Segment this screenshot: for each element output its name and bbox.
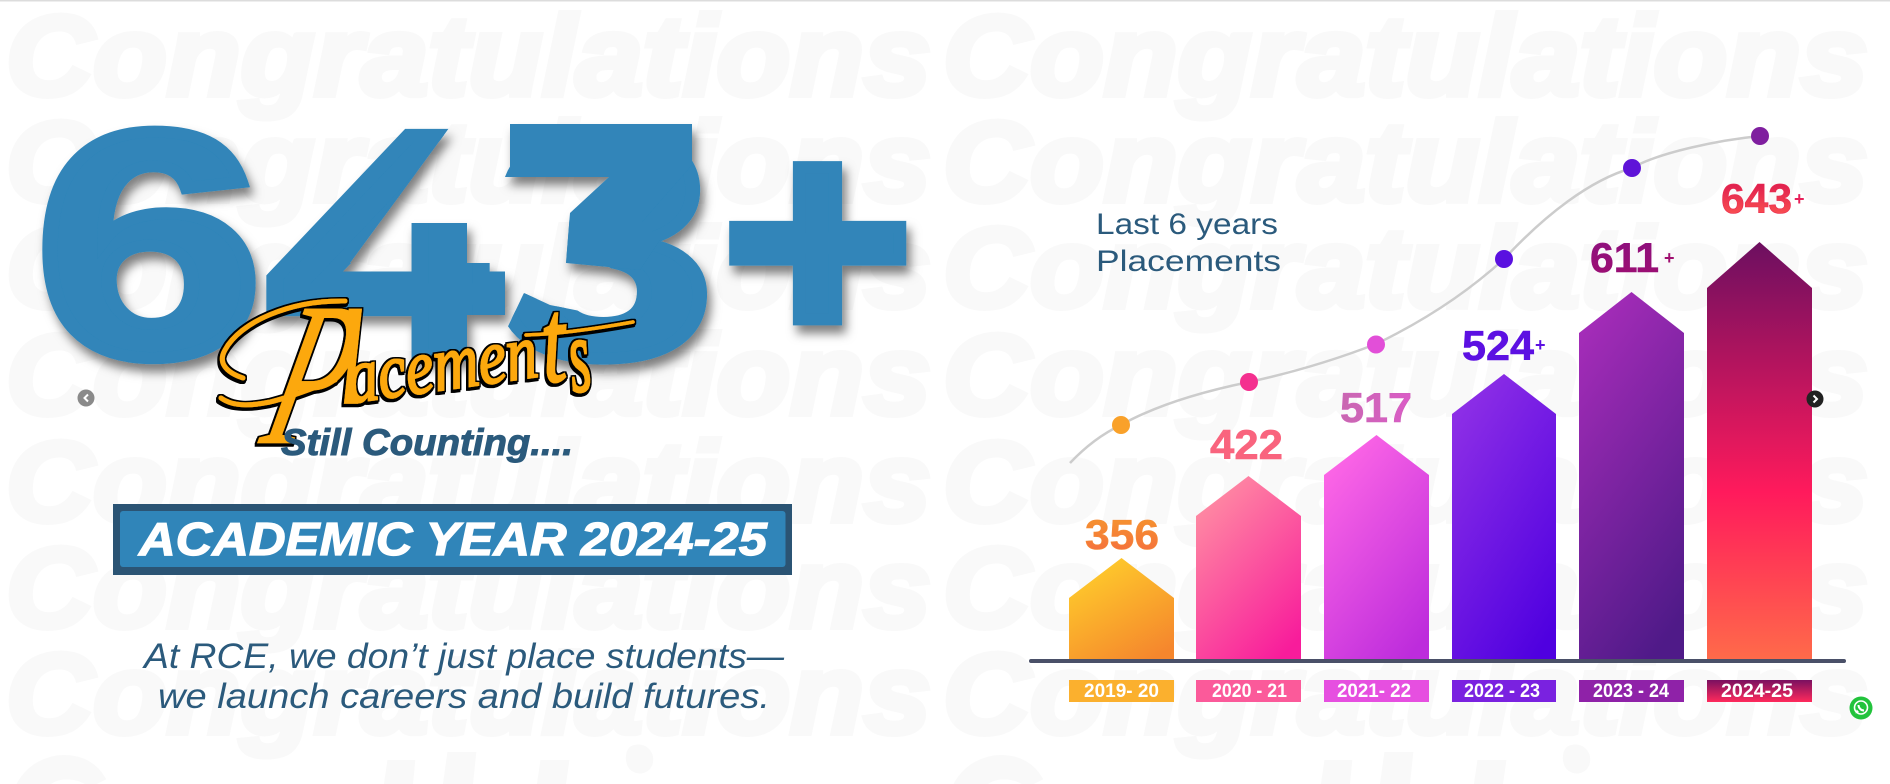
description text: we launch careers and build futures. [158, 677, 770, 716]
background pattern: Congratulations watermark: Congratulations [943, 205, 1868, 331]
bar 2023-24 [1579, 292, 1684, 659]
banner: Academic Year [113, 504, 792, 575]
tagline: Still Counting....: Still Counting.... [281, 422, 573, 463]
bar chart: placements by year [1029, 242, 1846, 663]
script word: Placements: s [560, 298, 597, 416]
chart title [1096, 208, 1281, 278]
headline number 643+: 3 [495, 66, 714, 424]
background pattern: Congratulations watermark: Congratulations [943, 312, 1868, 438]
value labels: + [1664, 248, 1675, 268]
headline number 643+: 4 [268, 66, 529, 423]
value labels: 422 [1210, 421, 1283, 468]
value labels: 524 [1462, 322, 1535, 369]
script word: Placements: l [340, 284, 363, 433]
bar 2020-21 [1196, 476, 1301, 659]
background pattern: Congratulations watermark: Congratulations [6, 525, 931, 651]
chart title: Last 6 years [1096, 208, 1278, 241]
value labels: 611 [1590, 234, 1659, 281]
year labels: 2024-25 [1721, 681, 1793, 702]
script word: Placements [221, 261, 633, 488]
year labels: 2023 - 24 [1593, 681, 1669, 702]
banner: Academic Year: ACADEMIC YEAR 2024-25 [138, 513, 769, 565]
value labels [1085, 175, 1805, 558]
script word: Placements: P [246, 261, 381, 488]
value labels: + [1794, 189, 1805, 209]
background pattern: Congratulations watermark: Congratulations [6, 205, 931, 331]
description text [142, 637, 785, 716]
background pattern: Congratulations watermark: Congratulations [943, 631, 1868, 757]
bar 2022-23 [1452, 374, 1556, 659]
background pattern: Congratulations watermark: Congratulations [943, 525, 1868, 651]
year labels: 2021- 22 [1337, 681, 1411, 702]
headline number 643+: + [722, 72, 913, 407]
year labels: 2020 - 21 [1212, 681, 1287, 702]
script word: Placements: t [537, 274, 572, 408]
background pattern: Congratulations watermark: Congratulations [6, 419, 931, 545]
year labels [1069, 680, 1812, 702]
bar 2024-25 [1707, 242, 1812, 659]
background pattern: Congratulations watermark: Congratulations [6, 631, 931, 757]
bar 2021-22 [1324, 435, 1429, 659]
chart title: Placements [1096, 245, 1281, 278]
script word: Placements: acemen [340, 307, 542, 420]
headline number 643+ [39, 124, 918, 380]
trend curve with dots [1070, 127, 1769, 463]
icon: whatsapp [1850, 696, 1872, 720]
background pattern: Congratulations watermark: Congratulations [943, 419, 1868, 545]
year labels: 2022 - 23 [1464, 681, 1540, 702]
value labels: 643 [1721, 175, 1792, 222]
value labels: 356 [1085, 511, 1159, 558]
value labels: 517 [1340, 384, 1412, 431]
icon: carousel previous [78, 390, 94, 406]
value labels: + [1535, 335, 1546, 355]
axis baseline [1029, 659, 1846, 663]
icon: carousel next [1806, 390, 1824, 408]
background pattern: Congratulations watermark: Congratulations [943, 99, 1868, 225]
background pattern: Congratulations watermark: Congratulations [6, 312, 931, 438]
top border line [0, 0, 1890, 2]
background pattern: Congratulations watermark: Congratulations [6, 99, 931, 225]
headline number 643+: 6 [35, 65, 263, 423]
description text: At RCE, we don’t just place students— [142, 637, 785, 676]
bar 2019-20 [1069, 558, 1174, 659]
year labels: 2019- 20 [1084, 681, 1159, 702]
